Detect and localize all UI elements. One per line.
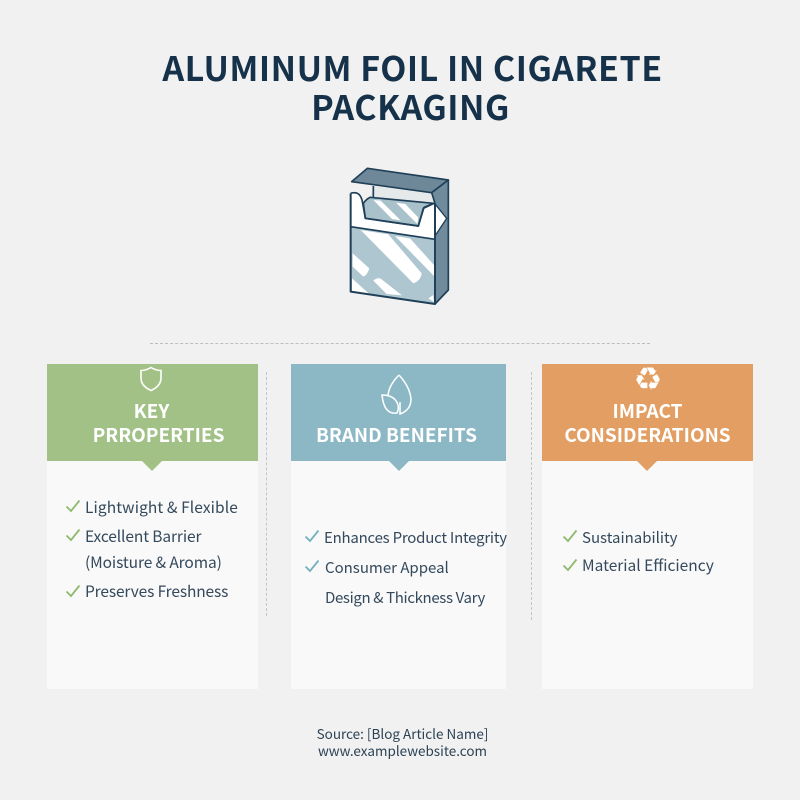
icon: shield xyxy=(140,366,162,392)
check xyxy=(562,530,578,542)
check xyxy=(66,528,80,542)
heading: IMPACT xyxy=(612,397,683,424)
header: impact considerations xyxy=(542,364,753,461)
list item: Consumer Appeal xyxy=(325,557,449,578)
pointer xyxy=(389,461,409,471)
title xyxy=(162,42,663,130)
icon: cigarette pack with foil xyxy=(350,168,450,305)
list item: Sustainability xyxy=(582,527,677,548)
check xyxy=(304,530,320,542)
check xyxy=(562,558,578,572)
check xyxy=(66,584,80,598)
list item: Lightwight & Flexible xyxy=(85,496,238,518)
header: key properties xyxy=(47,364,258,461)
list item: Excellent Barrier xyxy=(85,525,201,547)
heading line 2: CONSIDERATIONS xyxy=(564,421,731,448)
icon: leaves xyxy=(381,374,412,416)
source xyxy=(317,723,488,760)
check xyxy=(66,500,80,512)
list item continuation: (Moisture & Aroma) xyxy=(85,551,222,573)
list item: Preserves Freshness xyxy=(85,580,228,602)
list item: Enhances Product Integrity xyxy=(324,527,507,548)
heading: BRAND BENEFITS xyxy=(316,421,477,448)
check xyxy=(304,560,320,572)
title: PACKAGING xyxy=(311,81,510,130)
icon: recycle: ♻ xyxy=(634,360,662,398)
list item: Design & Thickness Vary xyxy=(325,587,485,608)
dashed separators xyxy=(266,372,267,616)
list item: Material Efficiency xyxy=(582,554,714,576)
panel: brand benefits xyxy=(291,364,506,689)
heading line 2: PRROPERTIES xyxy=(93,421,224,448)
pointer xyxy=(142,461,162,471)
source: www.examplewebsite.com xyxy=(318,740,487,760)
panel: impact considerations xyxy=(542,364,753,689)
source: Source: [Blog Article Name] xyxy=(317,723,488,743)
pointer xyxy=(637,461,657,471)
header: brand benefits xyxy=(291,364,506,461)
dashed divider xyxy=(150,343,650,344)
title: ALUMINUM FOIL IN CIGARETE xyxy=(162,42,663,91)
panel: key properties xyxy=(47,364,258,689)
heading: KEY xyxy=(134,397,169,424)
